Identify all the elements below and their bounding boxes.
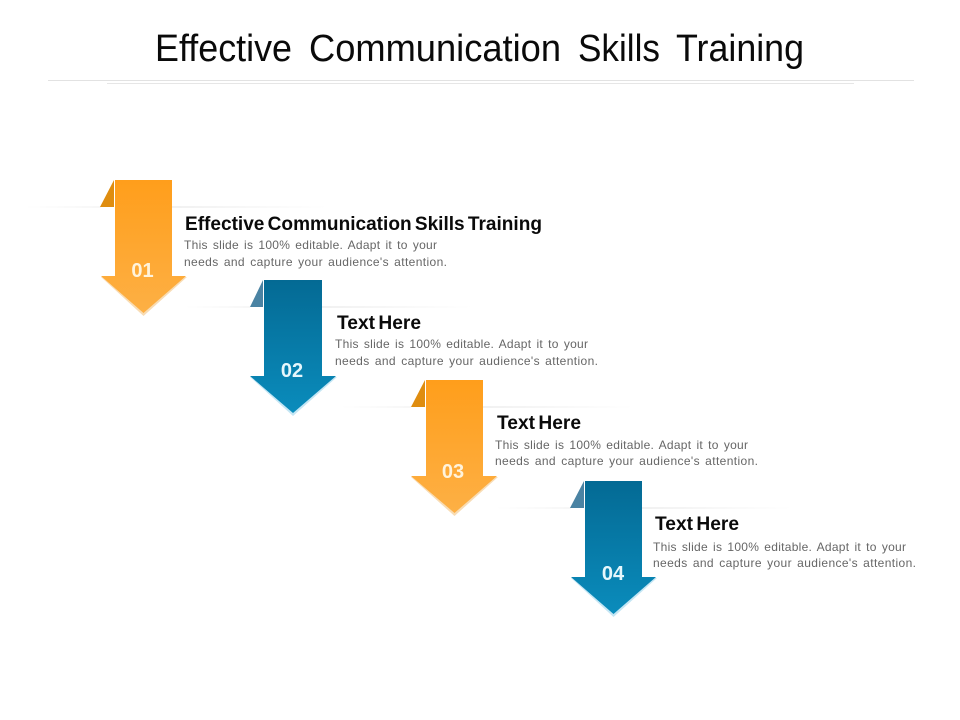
text 03: This slide is 100% editable. Adapt it to your: [495, 438, 748, 452]
number 01: 01: [131, 260, 154, 282]
text 04: This slide is 100% editable. Adapt it to your: [653, 540, 906, 554]
text 02: This slide is 100% editable. Adapt it to your: [335, 337, 588, 351]
arrow 04: [571, 481, 657, 617]
arrow 01: [101, 180, 187, 316]
text 02: [335, 337, 598, 368]
text 03: [495, 438, 758, 468]
heading 04: Text Here: [655, 514, 739, 535]
icon: fold 01: [100, 180, 114, 207]
arrow 03: [411, 380, 498, 516]
heading 03: Text Here: [497, 413, 581, 434]
heading 02: Text Here: [337, 313, 421, 334]
text 01: This slide is 100% editable. Adapt it to your: [184, 238, 437, 252]
heading 01: Effective Communication Skills Training: [185, 214, 542, 235]
number 03: 03: [442, 461, 464, 483]
text 04: [653, 540, 916, 570]
text 03: needs and capture your audience's attention.: [495, 454, 758, 468]
arrow 02: [250, 280, 337, 416]
title: [155, 28, 804, 70]
text 04: needs and capture your audience's attention.: [653, 556, 916, 570]
number 04: 04: [602, 563, 625, 585]
title: Skills: [578, 28, 660, 70]
title: Communication: [309, 28, 561, 70]
text 01: [184, 238, 447, 269]
step 03: [340, 380, 758, 516]
title: Effective: [155, 28, 292, 70]
text 01: needs and capture your audience's attention.: [184, 255, 447, 269]
icon: fold 04: [570, 481, 584, 508]
step 02: [185, 280, 598, 416]
title: Training: [676, 28, 804, 70]
icon: fold 02: [250, 280, 263, 307]
text 02: needs and capture your audience's attention.: [335, 354, 598, 368]
step 04: [495, 481, 916, 617]
icon: fold 03: [411, 380, 425, 407]
number 02: 02: [281, 360, 303, 382]
step 01: [25, 180, 542, 316]
